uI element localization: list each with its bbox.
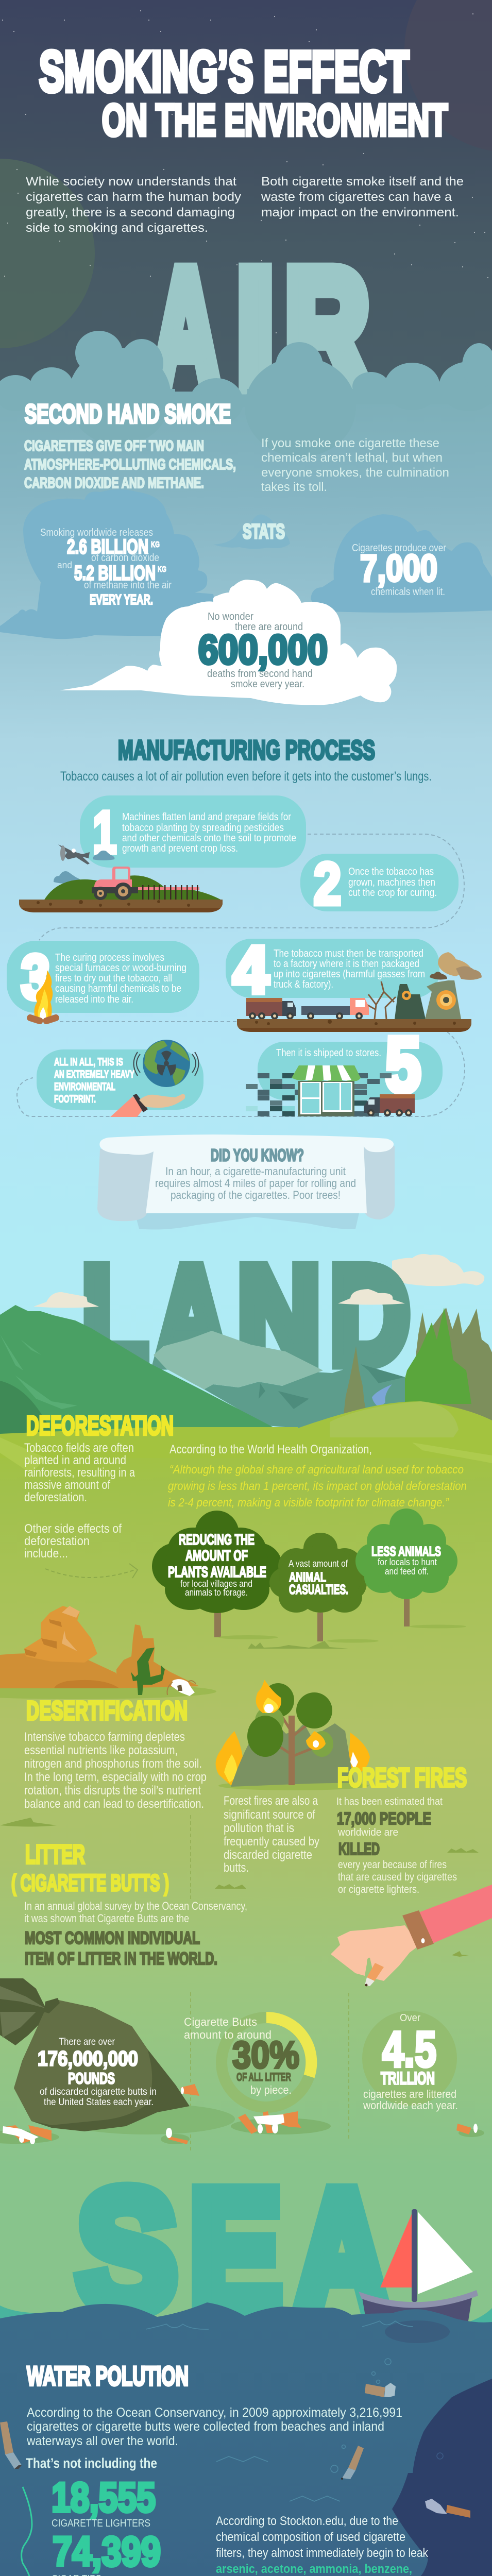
text: litter survey: it was shown that Cigarette Butts are the (24, 1912, 189, 1925)
stats: littered counts (49, 2475, 161, 2576)
trillion text (363, 2012, 458, 2112)
deaths text: there are around (235, 621, 303, 633)
footprint text: ALL IN ALL, THIS IS (54, 1056, 123, 1068)
step 3 text: The curing process involves (55, 952, 164, 963)
text: litter survey: In an annual global survey by the Ocean Conservancy, (24, 1900, 247, 1912)
intro text: greatly, there is a second damaging (26, 206, 235, 219)
text: litter survey (24, 1900, 247, 1969)
icon: irradiated globe (134, 1040, 199, 1087)
scroll text: requires almost 4 miles of paper for rolling and (155, 1177, 356, 1190)
step 2 text: Once the tobacco has (348, 866, 434, 877)
heading: desertification: DESERTIFICATION (26, 1696, 188, 1726)
trillion text: Over (400, 2012, 420, 2024)
panel: did you know scroll: DID YOU KNOW? (211, 1146, 304, 1164)
bag text: of discarded cigarette butts in (40, 2087, 157, 2097)
illustration: burning trees (216, 1680, 370, 1790)
text: desertification: In the long term, especially with no crop (24, 1770, 207, 1784)
arrow: to trees (45, 1564, 138, 1578)
bubbles (29, 2359, 443, 2576)
text: other side effects: include... (24, 1547, 68, 1561)
grass tufts (0, 1641, 479, 1957)
emissions text: of methane into the air (84, 580, 172, 591)
step 3 text: fires to dry out the tobacco, all (55, 973, 172, 984)
illustration: tractor on field (19, 867, 223, 912)
intro text: waste from cigarettes can have a (261, 190, 452, 204)
tree text: animals to forage. (185, 1587, 248, 1598)
text: culmination paragraph: If you smoke one cigarette these (261, 436, 439, 450)
heading: litter: LITTER (25, 1840, 85, 1870)
emissions text: and (57, 560, 72, 570)
text: ocean conservancy (26, 2405, 402, 2448)
text: stockton chemicals (216, 2514, 429, 2576)
text: ocean conservancy: waterways all over the world. (26, 2434, 178, 2448)
tree: less animals (355, 1509, 466, 1628)
text: deforestation intro: planted in and around (24, 1453, 126, 1467)
donut text: by piece. (250, 2083, 292, 2096)
text: culmination paragraph: chemicals aren’t lethal, but when (261, 451, 443, 465)
section word: SEA: A (295, 2155, 388, 2347)
footprint text: FOOTPRINT. (54, 1093, 96, 1105)
step 3 (7, 941, 199, 1013)
bag text (38, 2037, 157, 2108)
quote: “Although the global share of agricultural land used for tobacco (169, 1463, 464, 1476)
section word: SEA: S (77, 2155, 177, 2347)
emissions text: 2.6 BILLION (67, 536, 148, 558)
illustration: hand dropping cigarette (331, 1885, 492, 1987)
background: dark seabed (0, 2379, 492, 2576)
text: two main chemicals: ATMOSPHERE-POLLUTING CHEMICALS, (24, 456, 236, 473)
text: deforestation intro: rainforests, resulting in a (24, 1466, 135, 1480)
decorative ripples (64, 2321, 418, 2576)
chemicals text (352, 543, 446, 598)
background: teal wave edges (0, 2306, 492, 2326)
cloud: emissions stat (0, 489, 216, 639)
background: night sky (0, 0, 492, 412)
stat: 30 percent donut (184, 2015, 311, 2107)
emissions text: EVERY YEAR. (90, 591, 153, 607)
step 4: 4 (233, 932, 269, 1007)
landscape: foreground hills (0, 1401, 492, 1473)
text: two main chemicals: CARBON DIOXIDE AND METHANE. (24, 475, 204, 492)
emissions text: 5.2 BILLION (74, 562, 156, 584)
text: forest fires: pollution that is (224, 1821, 294, 1835)
background: sea (0, 2302, 492, 2576)
text: desertification: nitrogen and phosphorus from the soil. (24, 1757, 202, 1771)
tree: reducing plants (152, 1511, 282, 1639)
bag text: POUNDS (68, 2069, 115, 2088)
step 1 (80, 795, 306, 868)
footprint text (54, 1056, 134, 1105)
footprint text: ENVIRONMENTAL (54, 1081, 115, 1093)
heading: litter (11, 1840, 169, 1896)
step 1 text: tobacco planting by spreading pesticides (122, 822, 284, 834)
step 3 text: special furnaces or wood-burning (55, 962, 186, 974)
text: forest fires: significant source of (224, 1808, 315, 1822)
step 3: 3 (21, 942, 50, 1012)
trillion text: worldwide each year. (363, 2099, 458, 2112)
scroll text (155, 1165, 356, 1201)
text: not including: That’s not including the (26, 2455, 157, 2471)
tree text: PLANTS AVAILABLE (168, 1564, 266, 1581)
donut text: 30% (232, 2033, 299, 2076)
text: ocean conservancy: cigarettes or cigarette butts were collected from beaches and inland (27, 2419, 384, 2434)
callout: environmental footprint (37, 1040, 203, 1117)
step 4 text: up into cigarettes (harmful gasses from (274, 969, 425, 980)
section word: AIR: R (285, 235, 369, 421)
donut text: OF ALL LITTER (236, 2071, 291, 2083)
step 4 (226, 932, 439, 1007)
icon: campfire (26, 970, 60, 1025)
section word: AIR: A (152, 235, 219, 421)
text: litter survey: MOST COMMON INDIVIDUAL (25, 1928, 200, 1948)
chemicals text: 7,000 (360, 548, 437, 589)
curly brace (22, 2487, 32, 2576)
moon glow top right (404, 0, 492, 152)
panel: stats clouds (0, 489, 492, 705)
quote: is 2-4 percent, making a visible footprint for climate change.” (168, 1496, 449, 1509)
section word: LAND: A (156, 1238, 227, 1392)
text: stockton chemicals: According to Stockton.edu, due to the (216, 2514, 398, 2528)
step 4 text: truck & factory). (274, 979, 333, 990)
step 1 text: Machines flatten land and prepare fields for (122, 811, 291, 823)
tree text (168, 1532, 266, 1598)
step 3 text (55, 952, 186, 1005)
intro text (26, 175, 464, 235)
text: desertification: essential nutrients like potassium, (24, 1743, 178, 1757)
moon bottom left (0, 159, 95, 348)
cloud: small cream clouds (33, 1289, 405, 1308)
text: desertification: Intensive tobacco farming depletes (24, 1730, 185, 1744)
landscape: mountains and forest (0, 1305, 492, 1437)
cloud: stats label (213, 514, 290, 549)
text: deforestation intro (24, 1441, 135, 1504)
quote (168, 1463, 467, 1509)
text: forest fires (224, 1794, 319, 1875)
donut text: Cigarette Butts (184, 2015, 257, 2028)
trillion text: TRILLION (381, 2069, 435, 2089)
heading: second hand smoke: SECOND HAND SMOKE (25, 399, 231, 429)
scroll text: packaging of the cigarettes. Poor trees! (171, 1189, 341, 1201)
emissions text: KG (151, 540, 160, 549)
text: forest fires: butts. (224, 1861, 249, 1875)
illustration: desert rock, cactus and skull (0, 1606, 216, 1699)
tree text: LESS ANIMALS (371, 1544, 441, 1559)
tree text: and feed off. (385, 1566, 429, 1577)
background: pale sky (0, 392, 492, 1443)
section word: LAND: D (330, 1238, 410, 1392)
step 1 text (122, 811, 296, 854)
step 2 text (348, 866, 437, 899)
stats: littered counts: CIGARETTE LIGHTERS (52, 2518, 150, 2529)
text: deforestation intro: massive amount of (24, 1478, 110, 1492)
heading: water polution: WATER POLUTION (27, 2361, 189, 2392)
scroll text: In an hour, a cigarette-manufacturing unit (165, 1165, 346, 1178)
intro text: Both cigarette smoke itself and the (261, 175, 464, 189)
stat: people killed: It has been estimated that (336, 1796, 443, 1807)
tree text: for locals to hunt (378, 1557, 437, 1567)
text: stockton chemicals: arsenic, acetone, ammonia, benzene, (216, 2562, 412, 2576)
section word: AIR: I (236, 235, 274, 421)
step 5: Then it is shipped to stores. (276, 1047, 381, 1059)
text: culmination paragraph: everyone smokes, the culmination (261, 466, 449, 480)
boat hull shadow (385, 2320, 450, 2343)
heading: manufacturing process: MANUFACTURING PROCESS (118, 735, 375, 766)
text: culmination paragraph (261, 436, 449, 494)
text: ocean conservancy: According to the Ocean Conservancy, in 2009 approximately 3,216,991 (27, 2405, 402, 2420)
text: desertification: rotation, this disrupts the soil’s nutrient (24, 1784, 201, 1798)
stat: people killed (336, 1796, 457, 1895)
stat: people killed: 17,000 PEOPLE (337, 1809, 431, 1828)
stat: garbage bag (0, 1978, 235, 2134)
tree text: for local villages and (180, 1579, 252, 1589)
donut text (184, 2015, 299, 2096)
step 1 text: and other chemicals onto the soil to promote (122, 833, 296, 844)
bag text: There are over (59, 2037, 115, 2047)
litter: cigarette butts (0, 2084, 484, 2144)
icon: plane with spray cloud (58, 844, 114, 865)
heading: litter: ( CIGARETTE BUTTS ) (11, 1870, 169, 1896)
text: deforestation intro: deforestation. (24, 1490, 87, 1504)
step 3 text: released into the air. (55, 994, 133, 1005)
footprint text: AN EXTREMELY HEAVY (54, 1069, 134, 1080)
tree text (289, 1558, 348, 1597)
stats: littered counts: 18,555 (52, 2475, 156, 2521)
deaths text: smoke every year. (231, 679, 304, 690)
emissions text: Smoking worldwide releases (40, 527, 153, 538)
cloud: deaths stat (60, 580, 397, 705)
tree text: ANIMAL (289, 1569, 326, 1585)
step 2 text: grown, machines then (348, 877, 435, 888)
process dashed path (17, 834, 465, 1116)
text: litter survey: ITEM OF LITTER IN THE WORLD. (25, 1949, 217, 1969)
bag text: 176,000,000 (38, 2046, 138, 2070)
cloud: large cream (392, 1254, 484, 1286)
pixel pollution blocks (246, 1073, 392, 1116)
text: two main chemicals (24, 438, 236, 492)
text: other side effects: Other side effects of (24, 1522, 122, 1536)
text: stockton chemicals: filters, they almost immediately begin to leak (216, 2546, 429, 2560)
illustration: trucks and nuclear plant (237, 952, 482, 1032)
tree text (371, 1544, 441, 1577)
section word: SEA: E (190, 2155, 281, 2347)
text: desertification: balance and can lead to desertification. (24, 1797, 204, 1811)
cloud: chemicals stat (311, 514, 492, 613)
step 2 text: cut the crop for curing. (348, 887, 437, 899)
stat: people killed: or cigarette lighters. (338, 1884, 419, 1895)
deaths text: deaths from second hand (207, 668, 313, 680)
step 4 text: to a factory where it is then packaged (274, 958, 419, 970)
step 3 text: causing harmful chemicals to be (55, 983, 181, 994)
donut text: amount to around (184, 2028, 272, 2041)
illustration: sailboat (359, 2209, 478, 2334)
section word: LAND: N (237, 1238, 320, 1392)
step 2 (300, 851, 459, 917)
text: WHO attribution: According to the World Health Organization, (169, 1443, 372, 1456)
intro text: major impact on the environment. (261, 206, 459, 219)
step 1 text: growth and prevent crop loss. (122, 843, 238, 854)
floating cigarette butts (0, 2383, 470, 2576)
icon: delivery truck (364, 1094, 415, 1116)
step 5: 5 (385, 1021, 421, 1109)
icon: store (292, 1065, 361, 1116)
text: deforestation intro: Tobacco fields are often (24, 1441, 134, 1455)
intro text: cigarettes can harm the human body (26, 190, 241, 204)
panel: did you know scroll (97, 1134, 395, 1229)
bag text: the United States each year. (44, 2097, 154, 2108)
dashed dividers (191, 1815, 349, 2152)
tree text: REDUCING THE (179, 1532, 255, 1548)
stat: people killed: worldwide are (337, 1827, 398, 1838)
chemicals text: Cigarettes produce over (352, 543, 446, 554)
step 4 text: The tobacco must then be transported (274, 948, 423, 959)
step 1: 1 (93, 800, 116, 866)
step 4 text (274, 948, 425, 990)
stat: 4.5 trillion (362, 2011, 458, 2112)
tree text: A vast amount of (289, 1558, 348, 1569)
trillion text: cigarettes are littered (363, 2088, 456, 2100)
chemicals text: chemicals when lit. (371, 586, 445, 598)
background: land (0, 1435, 492, 2329)
stat: people killed: that are caused by cigarettes (338, 1871, 457, 1883)
cloud: stats label: STATS (243, 520, 285, 543)
text: two main chemicals: CIGARETTES GIVE OFF TWO MAIN (24, 438, 204, 454)
text: stockton chemicals: chemical composition of used cigarette (216, 2530, 405, 2544)
stat: people killed: KILLED (338, 1839, 380, 1858)
stat: people killed: every year because of fires (338, 1859, 447, 1871)
tree text: CASUALTIES. (289, 1582, 348, 1597)
tree: animal casualties (269, 1533, 379, 1642)
text: forest fires: frequently caused by (224, 1835, 319, 1849)
deaths text: No wonder (208, 611, 253, 622)
text: culmination paragraph: takes its toll. (261, 480, 327, 494)
stats: littered counts: 74,399 (53, 2529, 161, 2575)
emissions text: KG (158, 565, 166, 574)
cloud bank (0, 331, 492, 457)
deaths text: 600,000 (198, 626, 328, 672)
tree text: AMOUNT OF (185, 1548, 248, 1564)
text: forest fires: discarded cigarette (224, 1848, 312, 1862)
step 2: 2 (314, 851, 341, 917)
intro text: side to smoking and cigarettes. (26, 221, 208, 235)
title (39, 40, 448, 145)
text: other side effects: deforestation (24, 1534, 90, 1548)
trillion text: 4.5 (382, 2021, 436, 2077)
deaths text (198, 611, 328, 690)
emissions text (40, 527, 172, 607)
text: forest fires: Forest fires are also a (224, 1794, 318, 1808)
step 5 (246, 1021, 443, 1116)
text: other side effects (24, 1522, 122, 1561)
text: desertification (24, 1730, 207, 1811)
heading: deforestation: DEFORESTATION (26, 1411, 174, 1441)
section word: LAND: L (82, 1238, 147, 1392)
emissions text: of carbon dioxide (91, 552, 159, 564)
intro text: While society now understands that (26, 175, 236, 189)
icon: open hand (110, 1094, 185, 1117)
